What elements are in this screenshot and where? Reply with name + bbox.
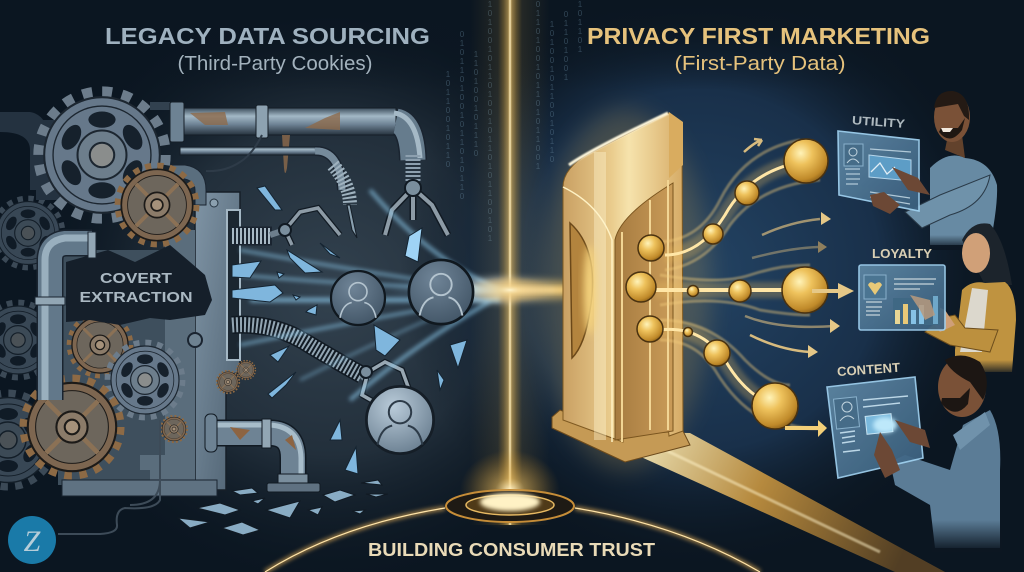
door leaf bbox=[563, 113, 683, 442]
gold data orbs bbox=[626, 139, 828, 429]
bottom arc and pedestal bbox=[265, 490, 760, 572]
screen: utility dashboard bbox=[838, 131, 930, 214]
panel: content bbox=[827, 355, 1002, 552]
title: privacy first marketing: (First-Party Data) bbox=[674, 53, 846, 75]
panel: utility bbox=[838, 91, 997, 250]
title: privacy first marketing bbox=[587, 23, 930, 75]
person: man in blue shirt bbox=[890, 355, 1002, 552]
gears bbox=[25, 94, 255, 474]
caption: building consumer trust: BUILDING CONSUMER TRUST bbox=[368, 540, 655, 560]
panel: legacy machine bbox=[0, 94, 448, 534]
binary data columns: 0110100101101011001 bbox=[534, 0, 542, 171]
binary data columns: 101001011010010110101100101 bbox=[486, 0, 494, 243]
binary data columns: 1010010110010110 bbox=[548, 20, 556, 164]
person: man in sweater bbox=[905, 91, 997, 250]
panel: loyalty bbox=[859, 223, 1016, 375]
door glow bbox=[540, 110, 710, 470]
screen: loyalty dashboard bbox=[859, 265, 945, 330]
title: privacy first marketing: PRIVACY FIRST MARKETING bbox=[587, 23, 930, 49]
title: legacy data sourcing bbox=[105, 23, 430, 75]
pipe: bottom drain bbox=[205, 414, 320, 492]
door base bbox=[552, 410, 690, 462]
screen: content dashboard bbox=[827, 377, 930, 478]
light path bbox=[623, 432, 945, 572]
label: covert extraction: EXTRACTION bbox=[80, 289, 192, 306]
user profile icons bbox=[331, 228, 473, 454]
glass shards bbox=[232, 186, 467, 474]
binary data columns: 10110010110 bbox=[444, 70, 452, 169]
label: content: CONTENT bbox=[837, 360, 901, 379]
golden data streams bbox=[640, 140, 825, 429]
title: legacy data sourcing: LEGACY DATA SOURCING bbox=[105, 23, 430, 49]
label: loyalty: LOYALTY bbox=[872, 246, 932, 261]
logo badge: Z bbox=[24, 525, 41, 558]
central light beam bbox=[460, 0, 560, 530]
label: covert extraction: COVERT bbox=[100, 270, 172, 287]
pipe: machine left elbow bbox=[35, 232, 96, 400]
cable bbox=[58, 420, 160, 534]
blue data stream bbox=[240, 190, 500, 400]
binary data columns bbox=[444, 0, 584, 243]
horizontal light beam bbox=[380, 276, 580, 304]
binary data columns: 01101001 bbox=[562, 10, 570, 82]
machine body bbox=[0, 112, 240, 496]
label: utility: UTILITY bbox=[852, 113, 905, 131]
pipe: lower hose claw bbox=[232, 325, 410, 412]
binary data columns: 101101 bbox=[576, 0, 584, 54]
background gears bbox=[0, 200, 61, 485]
pipe: top with claw bbox=[150, 102, 448, 238]
logo badge bbox=[8, 516, 56, 564]
person: woman in cardigan bbox=[925, 223, 1016, 375]
label: covert extraction bbox=[66, 245, 212, 325]
binary data columns: 0101101001011010110 bbox=[458, 30, 466, 201]
binary data columns: 110100101110 bbox=[472, 50, 480, 158]
golden door bbox=[540, 110, 945, 572]
gold arrows bbox=[744, 139, 854, 437]
pipe: middle claw bbox=[232, 208, 340, 245]
title: legacy data sourcing: (Third-Party Cookies) bbox=[178, 53, 372, 75]
